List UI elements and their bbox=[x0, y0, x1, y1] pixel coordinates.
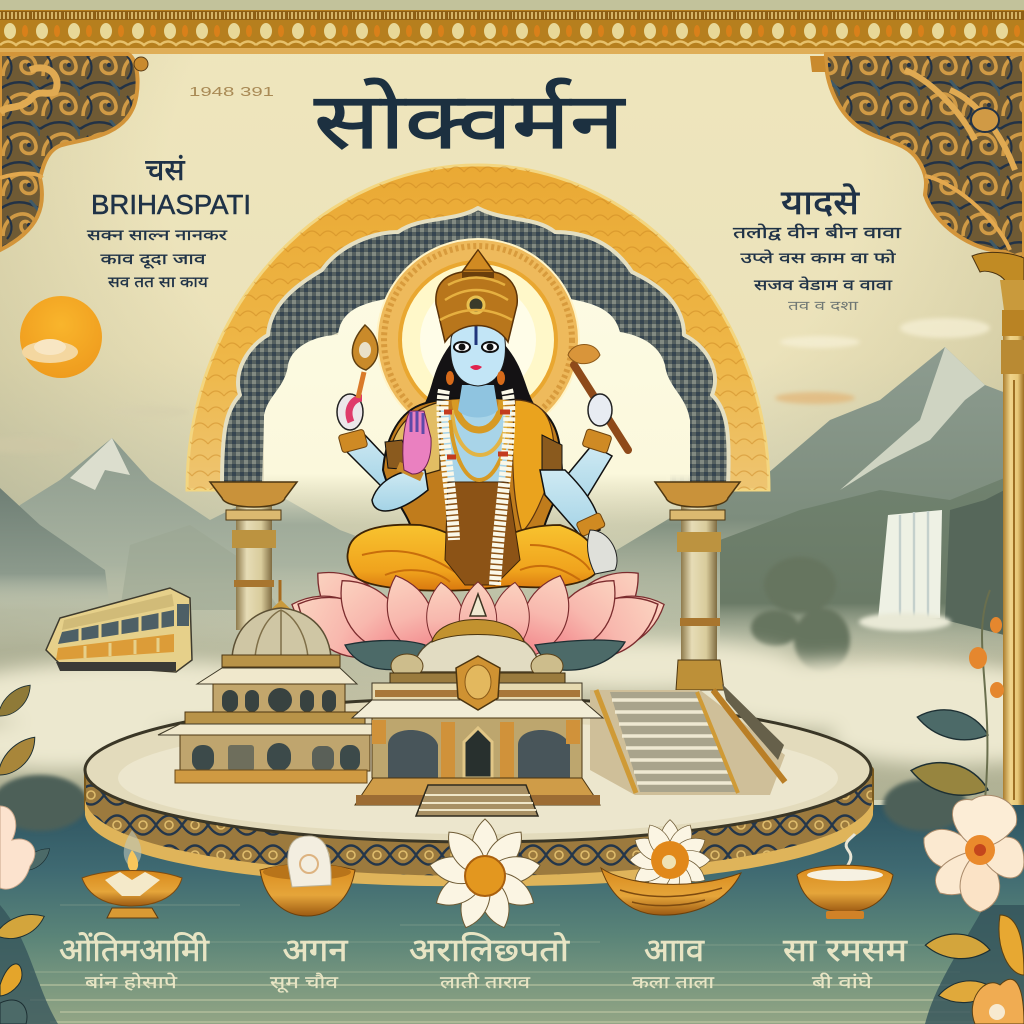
eyes bbox=[454, 342, 470, 352]
necklaces bbox=[450, 400, 510, 480]
scalloped dark arch bbox=[222, 208, 729, 485]
neck and face bbox=[458, 385, 498, 418]
right sash bbox=[513, 400, 554, 532]
right floral corner bbox=[909, 590, 1024, 1024]
bottom labels: बी वांघे bbox=[812, 972, 873, 992]
sun icon bbox=[20, 296, 102, 378]
front left arm bbox=[372, 411, 431, 511]
left floral corner bbox=[0, 683, 58, 1024]
mist band bbox=[0, 641, 1024, 769]
bottom labels: अगन bbox=[282, 932, 349, 968]
right corner ornament bbox=[810, 54, 1024, 260]
distant trees on banks bbox=[0, 775, 967, 831]
right text block: तलोद्व वीन बीन वावा bbox=[733, 223, 902, 242]
mountains left bbox=[0, 438, 420, 650]
arch opening bbox=[264, 292, 690, 525]
top border band bbox=[0, 0, 1024, 54]
platform bbox=[85, 698, 873, 886]
left corner ornament bbox=[0, 54, 148, 250]
crown bbox=[436, 250, 517, 342]
deity bbox=[337, 250, 628, 591]
mountains right bbox=[600, 347, 1024, 660]
offering: bowl with milk bbox=[797, 834, 893, 919]
clouds in the sky bbox=[0, 318, 990, 453]
central temple bbox=[352, 594, 603, 816]
left text block: सव तत सा काय bbox=[108, 274, 208, 291]
left text block: BRIHASPATI bbox=[91, 189, 251, 220]
right text block: तव व दशा bbox=[788, 298, 859, 313]
bare chest bbox=[440, 410, 512, 482]
dhoti legs bbox=[347, 525, 598, 591]
left text block: काव दूदा जाव bbox=[100, 251, 206, 269]
hair bbox=[415, 345, 545, 440]
flower garland bbox=[443, 390, 510, 585]
bottom labels: आाव bbox=[644, 932, 705, 968]
lotus back petals bbox=[283, 555, 673, 662]
medallion bbox=[456, 656, 500, 710]
right column bbox=[655, 482, 740, 690]
golden arch ring bbox=[187, 165, 769, 490]
offering: bowl with white sweet bbox=[260, 836, 355, 916]
date text: 1948 391 bbox=[189, 84, 274, 99]
earrings bbox=[446, 371, 454, 385]
tree near waterfall bbox=[751, 557, 850, 672]
rear left arm bbox=[337, 325, 398, 490]
front right arm bbox=[540, 470, 606, 537]
offering: white flower bbox=[428, 819, 542, 932]
lotus front petals bbox=[287, 566, 669, 674]
left text block: चसं bbox=[145, 154, 185, 187]
torso garment bbox=[383, 398, 562, 545]
water ripples bbox=[30, 905, 980, 1022]
bottom labels: सा रमसम bbox=[783, 932, 908, 968]
water bbox=[0, 805, 1024, 1024]
waterfall bbox=[859, 510, 951, 631]
stairs bbox=[590, 684, 785, 795]
halo behind deity bbox=[377, 239, 579, 441]
blessing hand bbox=[403, 411, 431, 474]
lotus base leaves bbox=[345, 640, 625, 670]
rear right arm bbox=[563, 344, 628, 512]
bottom labels: ओंतिमआमीि bbox=[59, 932, 210, 968]
right text block: सजव वेडाम व वावा bbox=[754, 276, 893, 294]
right text block: यादसे bbox=[781, 183, 860, 222]
sleeves bbox=[385, 435, 562, 478]
left temple bbox=[158, 580, 372, 783]
title: सोक्वर्मन bbox=[314, 77, 626, 165]
train bbox=[46, 588, 192, 672]
left column bbox=[210, 482, 297, 630]
bottom labels bbox=[59, 932, 908, 993]
right text block bbox=[733, 183, 902, 313]
offering: lotus lamp bbox=[82, 830, 182, 918]
bottom labels: लाती ताराव bbox=[440, 972, 531, 992]
offering: boat bowl with daisy bbox=[601, 820, 741, 915]
gold flowers bbox=[999, 915, 1024, 975]
right side column bbox=[972, 252, 1024, 805]
right text block: उप्ले वस काम वा फो bbox=[740, 249, 897, 267]
bottom labels: कला ताला bbox=[632, 973, 715, 992]
bottom labels: सूम चौव bbox=[270, 972, 339, 993]
bottom labels: बांन होसापे bbox=[85, 972, 177, 992]
large cream flower bbox=[924, 795, 1024, 912]
resting hand bbox=[588, 530, 617, 574]
left text block bbox=[87, 154, 251, 291]
left text block: सक्न साल्न नानकर bbox=[87, 227, 228, 244]
waist cloth bbox=[445, 482, 520, 585]
bottom labels: अरालिछ्पतो bbox=[409, 932, 570, 968]
left shoulder cloth bbox=[388, 402, 440, 478]
